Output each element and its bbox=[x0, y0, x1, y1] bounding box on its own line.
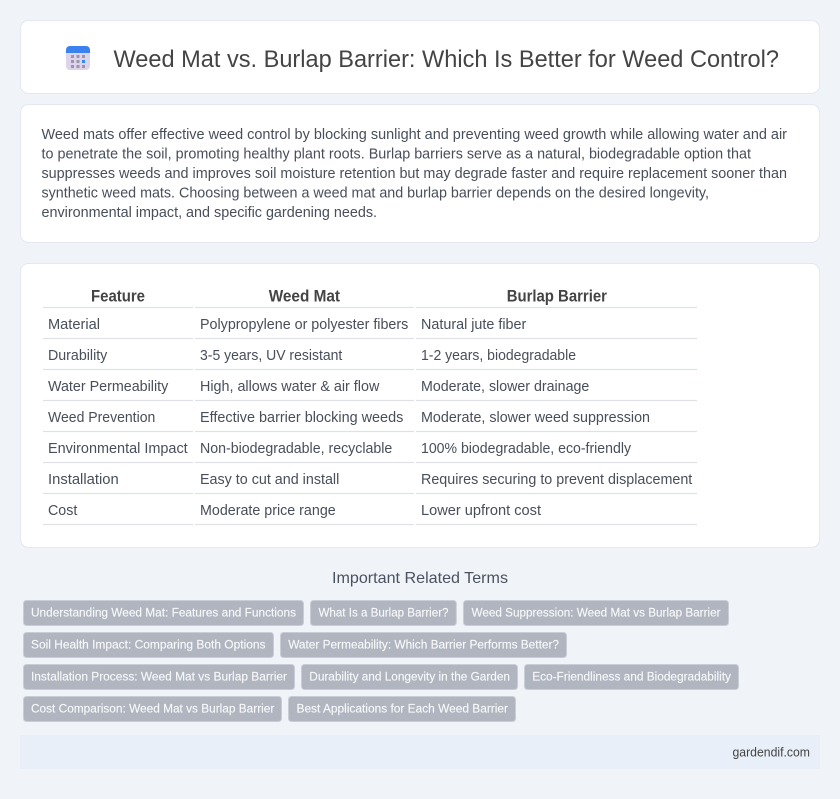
tag: Best Applications for Each Weed Barrier bbox=[296, 702, 508, 716]
tag: Understanding Weed Mat: Features and Functions bbox=[31, 606, 296, 620]
table row: water permeability: High, allows water & air flow bbox=[200, 379, 380, 395]
panel: comparison table bbox=[20, 264, 820, 548]
table row: environmental impact: Environmental Impact bbox=[48, 441, 188, 457]
tag bbox=[302, 664, 518, 690]
table row: cost: Lower upfront cost bbox=[421, 503, 541, 519]
table row: weed prevention: Moderate, slower weed suppression bbox=[421, 410, 650, 426]
table row: installation: Requires securing to prevent displacement bbox=[421, 472, 692, 488]
tag bbox=[524, 664, 738, 690]
text block: paragraph: environmental impact, and specific gardening needs. bbox=[42, 205, 377, 221]
table row: material: Polypropylene or polyester fibers bbox=[200, 317, 408, 333]
table row: durability: 3-5 years, UV resistant bbox=[200, 348, 342, 364]
footer bar bbox=[20, 735, 820, 769]
table row: environmental impact: Non-biodegradable, recyclable bbox=[200, 441, 392, 457]
text block: paragraph: suppresses weeds and improves soil moisture retention but may degrade faster and require replacement sooner than bbox=[42, 166, 787, 182]
tag bbox=[24, 632, 274, 658]
text block: paragraph: to penetrate the soil, promoting healthy plant roots. Burlap barriers serve as a natural, biodegradable option that bbox=[42, 146, 751, 162]
table row: weed prevention bbox=[48, 410, 650, 426]
table row: cost: Cost bbox=[48, 503, 77, 519]
tag: Durability and Longevity in the Garden bbox=[309, 670, 510, 684]
tag bbox=[310, 600, 456, 626]
table header: Feature bbox=[91, 288, 145, 306]
table row: installation: Installation bbox=[48, 472, 119, 488]
table row: material bbox=[48, 317, 526, 333]
table row: installation: Easy to cut and install bbox=[200, 472, 339, 488]
icon: calendar bbox=[66, 46, 90, 70]
tag bbox=[288, 696, 516, 722]
table row: installation bbox=[48, 472, 692, 488]
text block: paragraph: Weed mats offer effective weed control by blocking sunlight and preventing weed growth while allowing water and air bbox=[42, 127, 787, 143]
table row: water permeability bbox=[48, 379, 589, 395]
table row: water permeability: Moderate, slower drainage bbox=[421, 379, 589, 395]
tag: Cost Comparison: Weed Mat vs Burlap Barrier bbox=[31, 702, 274, 716]
table row: cost bbox=[48, 503, 541, 519]
tag: What Is a Burlap Barrier? bbox=[318, 606, 449, 620]
table row: environmental impact: 100% biodegradable, eco-friendly bbox=[421, 441, 632, 457]
tag: Soil Health Impact: Comparing Both Options bbox=[31, 638, 266, 652]
tag bbox=[464, 600, 728, 626]
tag: Installation Process: Weed Mat vs Burlap Barrier bbox=[31, 670, 287, 684]
table header: Burlap Barrier bbox=[507, 288, 608, 306]
tag bbox=[24, 664, 294, 690]
tag bbox=[280, 632, 566, 658]
table row: durability bbox=[48, 348, 576, 364]
table row: weed prevention: Effective barrier blocking weeds bbox=[200, 410, 403, 426]
table row: material: Material bbox=[48, 317, 100, 333]
footer: source domain: gardendif.com bbox=[732, 746, 810, 760]
tag list: related terms bbox=[24, 600, 738, 722]
table header: Weed Mat bbox=[269, 288, 341, 306]
panel: introduction paragraph bbox=[20, 104, 820, 242]
panel: title header bbox=[20, 20, 820, 94]
tag: Weed Suppression: Weed Mat vs Burlap Barrier bbox=[472, 606, 720, 620]
table row: cost: Moderate price range bbox=[200, 503, 336, 519]
tag: Water Permeability: Which Barrier Performs Better? bbox=[288, 638, 559, 652]
table row: environmental impact bbox=[48, 441, 632, 457]
table row: material: Natural jute fiber bbox=[421, 317, 526, 333]
tag bbox=[24, 696, 282, 722]
table row: durability: Durability bbox=[48, 348, 108, 364]
table row: durability: 1-2 years, biodegradable bbox=[421, 348, 576, 364]
table row: weed prevention: Weed Prevention bbox=[48, 410, 155, 426]
tag bbox=[24, 600, 304, 626]
text block: paragraph: synthetic weed mats. Choosing between a weed mat and burlap barrier depends on the desired longevity, bbox=[42, 186, 709, 202]
table header bbox=[91, 288, 608, 306]
text block: paragraph bbox=[42, 127, 787, 221]
heading: important related terms: Important Related Terms bbox=[332, 570, 508, 587]
title: Weed Mat vs. Burlap Barrier: Which Is Better for Weed Control? bbox=[114, 46, 779, 73]
table row: water permeability: Water Permeability bbox=[48, 379, 169, 395]
tag: Eco-Friendliness and Biodegradability bbox=[532, 670, 732, 684]
